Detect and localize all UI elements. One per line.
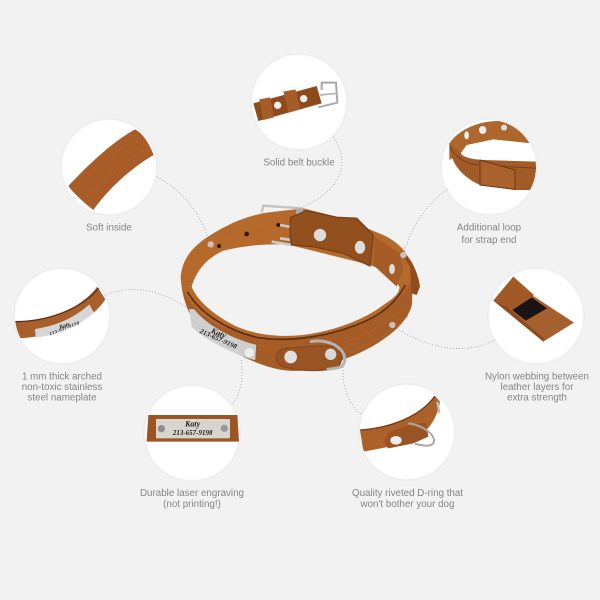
panel: soft inside: [62, 120, 156, 234]
caption: solid belt buckle: Solid belt buckle: [263, 158, 335, 168]
outer front band: [183, 280, 412, 371]
caption: nylon webbing: leather layers for: [501, 382, 574, 393]
caption: additional loop: Additional loop: [457, 222, 522, 234]
caption: additional loop: for strap end: [461, 235, 517, 246]
caption: nameplate: non-toxic stainless: [22, 382, 102, 393]
caption: nylon webbing: extra strength: [507, 392, 567, 404]
caption: nylon webbing: Nylon webbing between: [485, 372, 589, 382]
caption: soft inside: Soft inside: [86, 222, 132, 234]
caption: nameplate: steel nameplate: [27, 392, 97, 404]
caption: nameplate: 1 mm thick arched: [22, 372, 102, 382]
connector lines: [105, 137, 495, 415]
panel: laser engraving: Katy: [184, 420, 201, 429]
panel: nameplate: Katy: [58, 321, 71, 331]
panel: laser engraving: 213-657-9198: [172, 429, 213, 437]
caption: D-ring: won't bother your dog: [360, 499, 454, 510]
buckle strap keeper: [290, 211, 373, 266]
caption: laser engraving: [140, 488, 244, 510]
panel: nameplate: [15, 269, 109, 404]
strap end: [400, 252, 420, 295]
buckle rivets: [314, 229, 395, 274]
caption: additional loop: [457, 222, 522, 246]
panel: laser engraving: [140, 386, 244, 510]
connector pins: [208, 241, 406, 328]
nameplate text: 213-657-9198: [198, 327, 239, 351]
collar band: [181, 208, 413, 371]
caption: D-ring: [352, 488, 463, 510]
caption: laser engraving: Durable laser engraving: [140, 488, 244, 499]
caption: D-ring: Quality riveted D-ring that: [352, 488, 463, 499]
caption: nameplate: [22, 372, 102, 404]
caption: nylon webbing: [485, 372, 589, 404]
caption: laser engraving: (not printing!): [163, 499, 221, 510]
main collar: [181, 206, 420, 371]
holes in strap: [217, 223, 280, 248]
belt buckle: [262, 206, 302, 245]
dark edge line: [187, 285, 405, 339]
panel: nameplate: 213-657-9198: [48, 321, 81, 338]
panel: nylon webbing: [485, 269, 589, 404]
panel: additional loop: [442, 120, 537, 246]
nameplate text: Katy: [209, 326, 228, 340]
nameplate: [189, 309, 256, 360]
panel: solid belt buckle: [252, 55, 346, 168]
stitching: [223, 218, 409, 353]
D-ring tab: [276, 341, 345, 371]
panel: D-ring: [352, 385, 463, 510]
